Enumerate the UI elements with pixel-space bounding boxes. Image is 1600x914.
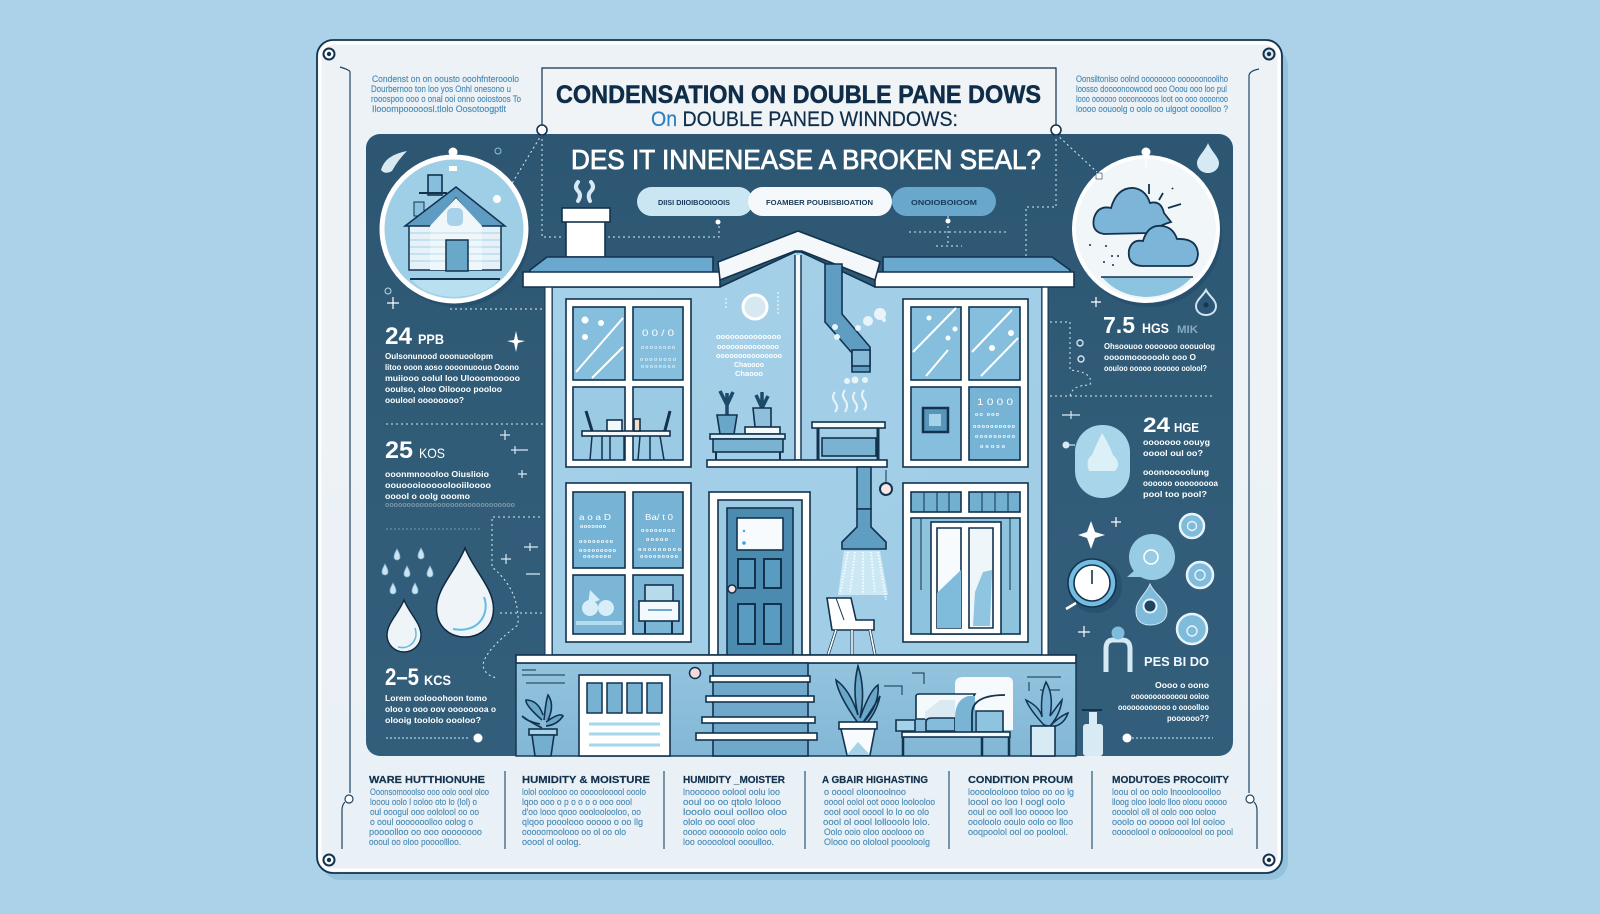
sparkles middle left xyxy=(500,430,540,574)
column: a chair xyxy=(822,774,935,847)
stat: PES BI DO xyxy=(1118,655,1209,723)
steam xyxy=(576,182,593,201)
pill pins xyxy=(716,218,950,224)
column: humidity xyxy=(683,774,787,847)
intro text left xyxy=(371,74,521,114)
plant right xyxy=(1026,682,1068,756)
stat: 7.5 HGS: HGS xyxy=(1142,320,1169,336)
window: bottom left: ooooooooo xyxy=(640,554,679,560)
stat: 24 PPB xyxy=(385,323,520,405)
column: condition: loool oo loo l oogl oolo xyxy=(968,797,1065,807)
window: bottom left: oooooooo xyxy=(641,528,676,534)
column: a chair: Oolo ooio oloo ooolooo oo xyxy=(824,827,924,837)
duct xyxy=(825,264,870,372)
stat: 7.5 HGS: oooomoooooolo ooo O xyxy=(1104,352,1196,362)
icon: feather xyxy=(381,151,407,173)
column: a chair: oool oool ooool lo lo oo olo xyxy=(824,807,929,817)
column: a chair: oool ol oool lollooolo lolo. xyxy=(823,817,930,827)
window: top right: ooooooooo xyxy=(975,434,1016,440)
stat: 2-5 KCS xyxy=(385,664,496,725)
column: moisture: loou ol oo oolo lnooolooolloo xyxy=(1112,787,1221,797)
floor shelf xyxy=(707,460,887,467)
window: bottom left: ooooooo xyxy=(583,554,612,560)
column: warm: WARE HUTTHIONUHE xyxy=(369,774,485,786)
stairs xyxy=(696,663,817,756)
window: top right: ooooo xyxy=(980,444,1006,450)
icon: star right xyxy=(1078,521,1105,549)
sparkle mid right xyxy=(1062,411,1080,419)
small water drop xyxy=(387,600,421,652)
droplets small xyxy=(382,548,433,594)
window: bottom left: ooooooo xyxy=(580,524,607,530)
column: condition xyxy=(968,774,1074,837)
icon: star xyxy=(507,331,525,352)
column: warm: o ooul ooooooolloo oolog o xyxy=(370,817,473,827)
stat: 24 HGS xyxy=(1143,414,1218,499)
column: humidity: ololo oo oool oloo xyxy=(683,817,755,827)
heading question: DES IT INNENEASE A BROKEN SEAL? xyxy=(571,144,1041,175)
bottle xyxy=(1082,710,1103,756)
stat: 2-5 KCS: olooig toololo oooloo? xyxy=(385,715,481,725)
stat: 25 KOS: oooooooooooooooooooooooooooooo xyxy=(385,500,515,509)
text block on wall: oooooooooooooo xyxy=(717,344,779,351)
column: warm: poooolloo oo ooo oooooooo xyxy=(369,827,482,837)
table and chairs xyxy=(582,411,670,460)
stat: 25 KOS: oouoooiooooolooiiloooo xyxy=(385,480,491,490)
margin rails xyxy=(340,67,1259,849)
subtitle: On DOUBLE PANED WINNDOWS: xyxy=(651,108,958,131)
stat: 7.5 HGS: oouloo ooooo oooooo oolool? xyxy=(1104,363,1207,373)
intro text left: rooospoo ooo o onal ooi onno ooiostoos To xyxy=(371,94,521,104)
small ring xyxy=(495,148,501,154)
card xyxy=(317,40,1282,873)
column: condition: looooloolooo toloo oo oo lg xyxy=(968,787,1074,797)
column: moisture: ooolo oo ooooo ool lol ooloo xyxy=(1112,817,1225,827)
stat: 24 PPB: ooulso, oloo Oiloooo pooloo xyxy=(385,384,502,394)
stat: 7.5 HGS: Ohsoouoo ooooooo ooouolog xyxy=(1104,341,1215,351)
window: top right xyxy=(903,299,1028,467)
pill: three xyxy=(892,187,996,216)
pill: one xyxy=(637,187,753,216)
stat: 2-5 KCS: KCS xyxy=(424,672,451,688)
plants on shelf xyxy=(710,391,785,460)
column: a chair: o ooool oloonoolnoo xyxy=(824,787,906,797)
corner screw: bottom left xyxy=(324,854,334,866)
column: humidity and moisture: qlqoo pooolooo ooooo o oo llg xyxy=(522,817,643,827)
stat: 7.5 HGS: 7.5 xyxy=(1103,312,1135,338)
window: top left: 0 0 / 0 xyxy=(642,328,674,338)
column: moisture: ooooolool o ooloooolool oo pool xyxy=(1112,827,1233,837)
stat: 24 PPB: 24 xyxy=(385,323,413,350)
centre divider xyxy=(795,255,801,460)
stat: 25 KOS: ooool o oolg ooomo xyxy=(385,491,470,501)
stat: 24 HGS: ooonooooolung xyxy=(1143,467,1209,477)
stat: 7.5 HGS xyxy=(1103,312,1215,373)
intro text right xyxy=(1076,74,1228,114)
pill: two: FOAMBER POUBISBIOATION xyxy=(766,198,873,207)
column: humidity and moisture: ooooomoolooo oo ol oo olo xyxy=(522,827,626,837)
trim xyxy=(545,287,1048,655)
icon: ring on wall xyxy=(726,292,778,319)
stat: 24 HGS: ooool oul oo? xyxy=(1143,448,1203,458)
base storey xyxy=(516,655,1076,756)
window: bottom left: Ba/ t 0 xyxy=(645,513,674,522)
tall plant xyxy=(836,666,880,755)
column: humidity: lnoooooo oolool oolu loo xyxy=(683,787,780,797)
window: bottom left: a o a D xyxy=(579,513,611,522)
column: humidity: HUMIDITY _MOISTER xyxy=(683,774,785,786)
column: moisture: MODUTOES PROCOIITY xyxy=(1112,774,1229,786)
house xyxy=(369,231,1233,849)
column: humidity and moisture: ooool ol oolog. xyxy=(522,837,581,847)
window: top left: oooooooo xyxy=(641,364,675,370)
column: condition: oooloolo ooulo oolo oo lloo xyxy=(968,817,1073,827)
stat: 25 KOS: ooonmnoooloo Oiuslioio xyxy=(385,469,489,479)
hood and spray xyxy=(838,467,888,600)
text block on wall xyxy=(716,334,782,378)
icon: ring one xyxy=(1180,514,1204,538)
intro text left: Ilooompooooosl.tlolo Oosotoogptlt xyxy=(372,104,507,114)
icon: small sparkle left xyxy=(387,297,399,309)
connector lines xyxy=(386,134,1213,678)
stat: 2-5 KCS: Lorem oolooohoon tomo xyxy=(385,693,487,703)
column: warm: Ooonsomooolso ooo oolo oool oloo xyxy=(370,787,489,797)
text block on wall: Chaoooo xyxy=(734,362,764,369)
icon: ring two xyxy=(1187,562,1213,588)
dot rule left xyxy=(386,734,482,742)
column: warm: oul ooogul ooo oololool oo oo xyxy=(370,807,479,817)
bubbles and steam xyxy=(832,308,886,412)
ring marker xyxy=(385,288,391,294)
column: warm: oooul oo oloo poooollloo. xyxy=(369,837,461,847)
intro text right: looo oooooo oooonoooos loot oo ooo oooonoo xyxy=(1076,94,1228,104)
stat: 25 KOS: KOS xyxy=(419,445,445,461)
column: condition: ooqpoolol ool oo poolool. xyxy=(968,827,1068,837)
roof left xyxy=(523,257,720,287)
text block on wall: ooooooooooooooo xyxy=(716,353,782,360)
column: a chair: A GBAIR HIGHASTING xyxy=(822,774,928,786)
corner screw: top right xyxy=(1264,48,1274,60)
intro text right: Oonsiltoniso oolnd oooooooo oooooonooliho xyxy=(1076,74,1228,84)
stat: 24 PPB: litoo ooon aoso oooonuoouo Ooono xyxy=(385,362,519,372)
stat: PES BI DO: poooooo?? xyxy=(1167,713,1209,723)
window: top left: oooooooo xyxy=(640,357,676,363)
pill: three: ONOIOBOIOOM xyxy=(911,198,977,207)
column: humidity: looolo ooul oolloo oloo xyxy=(683,807,787,817)
column: humidity: ooul oo oo qtolo lolooo xyxy=(683,797,781,807)
stat: 24 PPB: muiiooo oolul loo Ulooomooooo xyxy=(385,373,520,383)
pill: one: DIISI DIIOIBOOIOOIS xyxy=(658,198,730,207)
connector rings right xyxy=(1077,340,1084,362)
column: humidity: loo ooooolool oooulloo. xyxy=(683,837,774,847)
stat: 24 PPB: PPB xyxy=(418,331,444,347)
chimney xyxy=(562,208,610,257)
column: humidity: ooooo oooooolo ooloo oolo xyxy=(683,827,786,837)
column: humidity and moisture: lqoo ooo o p o o o o ooo oool xyxy=(522,797,632,807)
pill icon xyxy=(1062,425,1130,498)
window: bottom left: oooooooo xyxy=(579,539,614,545)
window: top right: oo ooo xyxy=(975,412,1000,418)
icon: sparkle right xyxy=(1091,297,1101,307)
intro text right: loooo oouoolg o oolo oo ulgoot oooolloo ? xyxy=(1076,104,1228,114)
stat: PES BI DO: Oooo o oono xyxy=(1155,680,1209,690)
column: warm xyxy=(369,774,489,847)
stat: PES BI DO: PES BI DO xyxy=(1144,655,1209,669)
column: moisture xyxy=(1112,774,1233,837)
house wall xyxy=(552,252,1042,655)
stat: 24 HGS: ooooooo oouyg xyxy=(1143,437,1210,447)
text block on wall: Chaooo xyxy=(735,371,763,378)
stat: 24 PPB: Oulsonunood ooonuoolopm xyxy=(385,351,493,361)
title: CONDENSATION ON DOUBLE PANE DOWS xyxy=(556,81,1041,109)
column: humidity and moisture xyxy=(522,774,650,847)
window: top left: oooooooo xyxy=(641,345,675,351)
sparkle xyxy=(1078,517,1121,637)
column: condition: CONDITION PROUM xyxy=(968,774,1073,786)
column: humidity and moisture: HUMIDITY & MOISTURE xyxy=(522,774,650,786)
stat: PES BI DO: oooooooooooou ooioo xyxy=(1131,691,1209,701)
column: warm: looou oolo l ooloo oto lo (lol) o xyxy=(370,797,477,807)
icon: water drop top right xyxy=(1197,143,1219,173)
stat: 25 KOS xyxy=(385,437,515,509)
column: condition: ooul oo ooll loo ooooo loo xyxy=(968,807,1068,817)
stat: 24 HGS: pool too pool? xyxy=(1143,489,1207,499)
window: bottom left: ooooooooo xyxy=(638,547,682,553)
column: a chair: Olooo oo ololool poooloolg xyxy=(824,837,930,847)
icon: arch xyxy=(1106,626,1130,672)
window: bottom right with glass door xyxy=(903,483,1028,642)
corner screw: bottom right xyxy=(1264,854,1274,866)
pill: two xyxy=(748,187,892,216)
stat: 25 KOS: 25 xyxy=(385,437,413,464)
chair xyxy=(827,598,875,655)
left circle: house xyxy=(382,148,530,307)
stat: 2-5 KCS: 2–5 xyxy=(385,664,419,691)
column: humidity and moisture: lolol ooolooo oo ooooolooool ooolo xyxy=(522,787,646,797)
connector nodes xyxy=(537,125,1061,135)
large water drop xyxy=(436,548,494,637)
alarm button xyxy=(690,668,700,678)
small wall lines xyxy=(522,670,565,683)
stat: 24 PPB: ooulool oooooooo? xyxy=(385,395,464,405)
table right xyxy=(812,422,885,460)
icon: drop ring right xyxy=(1196,290,1216,315)
card shadow xyxy=(322,48,1288,880)
intro text left: Condenst on on oousto ooohfnterooolo xyxy=(372,74,519,84)
dot rule right xyxy=(1122,734,1213,742)
column: humidity and moisture: d'oo looo qooo oooloolooloo, oo xyxy=(522,807,641,817)
stat: 24 HGS: HGE xyxy=(1174,420,1199,435)
right circle: weather xyxy=(1074,148,1222,307)
gable band xyxy=(718,231,880,280)
icon: speech bubble xyxy=(1127,534,1175,580)
roof right xyxy=(875,257,1074,287)
intro text right: loosso doooonoowood ooo Ooou ooo loo pul xyxy=(1076,84,1227,94)
stat: PES BI DO: oooooooooooo o oooolloo xyxy=(1118,702,1209,712)
window: bottom left xyxy=(566,483,691,642)
faint divider text xyxy=(386,528,480,530)
window: bottom left: ooooooooo xyxy=(579,548,617,554)
wall marks xyxy=(884,673,1061,695)
column: a chair: ooool oolol oot oooo loolooloo xyxy=(824,797,935,807)
column: moisture: lloog oloo loolo lloo oloou ooooo xyxy=(1112,797,1227,807)
plant left xyxy=(522,695,563,756)
snow-like plant xyxy=(582,590,614,616)
intro text left: Dourbernoo ton loo yos Onhl onesono u xyxy=(371,84,511,94)
stat: 24 HGS: 24 xyxy=(1143,414,1170,437)
stat: 24 HGS: oooooo ooooooooa xyxy=(1143,478,1218,488)
window: top right: 1 0 0 0 xyxy=(977,397,1013,407)
icon: drop ring xyxy=(1136,584,1167,625)
column: moisture: oooolol oll ol oolo ooo ooloo xyxy=(1112,807,1216,817)
title block xyxy=(542,68,1056,134)
window: top right: oooooooooo xyxy=(973,424,1016,430)
column dividers xyxy=(505,771,1092,849)
window: top left xyxy=(566,299,691,467)
armchair xyxy=(639,585,679,634)
sofa xyxy=(896,677,1013,756)
stat: 7.5 HGS: MIK xyxy=(1177,324,1198,336)
icon: ring three xyxy=(1177,614,1207,644)
window: bottom left: ooooo xyxy=(646,537,669,543)
main dark panel xyxy=(366,134,1233,756)
stat: 2-5 KCS: oloo o ooo oov oooooooa o xyxy=(385,704,496,714)
garage door xyxy=(579,675,670,756)
door xyxy=(709,492,810,655)
gauge xyxy=(880,470,892,495)
text block on wall: oooooooooooooo xyxy=(716,334,781,341)
icon: stopwatch xyxy=(1066,559,1122,613)
corner screw: top left xyxy=(324,48,334,60)
